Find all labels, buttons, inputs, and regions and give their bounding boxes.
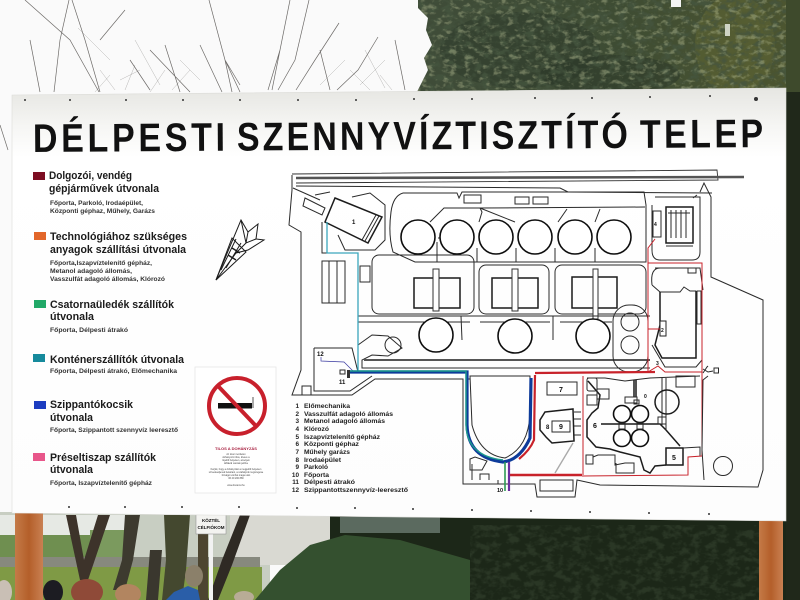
legend item: technology materials: Főporta,Iszapvíztelenítő gépház, bbox=[50, 260, 152, 267]
map: striped building bbox=[322, 261, 370, 303]
map: road around central basin bbox=[470, 376, 530, 458]
notice text: TILOS A DOHÁNYZÁS bbox=[215, 446, 257, 451]
map key: numbered list: Szippantottszennyvíz-leeresztő bbox=[304, 487, 408, 494]
map: NE dewatering complex and 4 bbox=[652, 195, 700, 260]
legend item: staff and guest vehicles: Dolgozói, vendég bbox=[49, 170, 132, 182]
map key: numbered list: 10 bbox=[292, 472, 299, 479]
map key: numbered list: Délpesti átrakó bbox=[304, 479, 355, 486]
map key: numbered list: 7 bbox=[295, 449, 299, 456]
title: SZENNYVÍZTISZTÍTÓ bbox=[237, 111, 628, 159]
legend item: technology materials: Technológiához szükséges bbox=[50, 231, 187, 243]
map key: numbered list: Műhely garázs bbox=[304, 449, 350, 456]
legend item: staff and guest vehicles: gépjárművek útvonala bbox=[49, 183, 160, 195]
legend item: sewer sediment: útvonala bbox=[50, 311, 95, 323]
notice text: Kérjük, hogy a dohányzást a megjelölt helyeken bbox=[211, 468, 262, 471]
map: west yard and station 11/12: 10 bbox=[497, 488, 503, 494]
map: coloured transport routes bbox=[327, 222, 702, 491]
legend item: container transport: Főporta, Délpesti átrakó, Előmechanika bbox=[50, 368, 178, 375]
right wooden post bbox=[759, 520, 783, 600]
map key: numbered list: 1 bbox=[295, 403, 299, 410]
map: right building with 2 and 3: 3 bbox=[656, 361, 659, 367]
background: dark bush lower right bbox=[255, 516, 786, 600]
legend bbox=[33, 170, 187, 487]
legend item: pressed sludge bbox=[33, 452, 157, 487]
map: south-east works with buildings 5 and 6: 6 bbox=[593, 423, 597, 430]
map: small details east bbox=[702, 366, 732, 480]
map: garage 7 and office buildings 8 and 9 bbox=[540, 382, 581, 491]
legend item: technology materials: Metanol adagoló állomás, bbox=[50, 268, 132, 275]
legend item: technology materials bbox=[34, 231, 187, 283]
legend item: technology materials: Vasszulfát adagoló állomás, Klórozó bbox=[50, 276, 165, 283]
legend item: suction trucks bbox=[34, 399, 178, 434]
map: garage 7 and office buildings 8 and 9: 7 bbox=[559, 387, 563, 394]
map: lower row tanks bbox=[358, 305, 650, 372]
legend item: sewer sediment: Csatornaüledék szállítók bbox=[50, 299, 175, 311]
map key: numbered list: 9 bbox=[295, 464, 299, 471]
title bbox=[33, 110, 763, 161]
map key: numbered list: Iszapvíztelenítő gépház bbox=[304, 434, 380, 441]
map key: numbered list: 2 bbox=[295, 411, 299, 418]
small sign on pole: KÖZTÉL bbox=[202, 516, 220, 523]
visitors at bottom bbox=[0, 565, 254, 600]
map: south-east works with buildings 5 and 6: 0 bbox=[644, 394, 647, 400]
icon: no smoking bbox=[209, 378, 265, 434]
map: middle row basins bbox=[372, 255, 646, 319]
title: DÉLPESTI bbox=[33, 114, 225, 161]
map key: numbered list: Előmechanika bbox=[304, 403, 350, 410]
map key: numbered list: Klórozó bbox=[304, 426, 329, 433]
legend item: sewer sediment: Főporta, Délpesti átrakó bbox=[50, 327, 128, 334]
map: south-east works with buildings 5 and 6 bbox=[586, 376, 700, 473]
background: lower left park bbox=[0, 512, 340, 600]
map: pre-treatment building 1: 1 bbox=[352, 220, 356, 226]
left wooden post bbox=[15, 512, 43, 600]
map: garage 7 and office buildings 8 and 9: 8 bbox=[546, 425, 550, 431]
map key: numbered list: Vasszulfát adagoló állomás bbox=[304, 411, 393, 418]
map: top row tanks block bbox=[390, 192, 646, 262]
legend item: suction trucks: Szippantókocsik bbox=[50, 399, 134, 411]
legend item: suction trucks: Főporta, Szippantott szennyvíz leeresztő bbox=[50, 427, 178, 434]
map key: numbered list: Központi géphaz bbox=[304, 441, 359, 448]
map key: numbered list: 6 bbox=[295, 441, 299, 448]
map key: numbered list: Metanol adagoló állomás bbox=[304, 418, 385, 425]
map key: numbered list: 8 bbox=[295, 457, 299, 464]
legend item: pressed sludge: útvonala bbox=[50, 464, 94, 476]
background: bare branches bbox=[0, 0, 405, 150]
notice text: szíveskedjenek betartani, a szabályok megszegése bbox=[209, 471, 264, 474]
notice text: dohányozni tilos, kivéve a bbox=[222, 456, 250, 459]
map key: numbered list: 11 bbox=[292, 479, 299, 486]
legend item: sewer sediment bbox=[34, 299, 175, 334]
map: west yard and station 11/12: 11 bbox=[339, 380, 346, 386]
notice text: www.fovarosi.hu bbox=[227, 484, 245, 487]
map key: numbered list: Irodaépület bbox=[304, 457, 342, 464]
map key: numbered list: 5 bbox=[295, 434, 299, 441]
map key: numbered list: 4 bbox=[295, 426, 299, 433]
map: site boundary bbox=[289, 175, 763, 497]
mounting screws bbox=[24, 95, 758, 515]
notice text: táblával vannak jelölve bbox=[224, 462, 249, 465]
notice text: bírságot vonhat maga után bbox=[222, 474, 251, 477]
legend item: container transport: Konténerszállítók útvonala bbox=[50, 354, 185, 366]
map: south-east works with buildings 5 and 6: 5 bbox=[672, 455, 676, 462]
legend item: container transport bbox=[33, 354, 185, 375]
map: road band along the top bbox=[292, 170, 744, 193]
route: shared main road multi-colour bbox=[350, 371, 531, 491]
map key: numbered list bbox=[292, 403, 408, 494]
background: tree foliage top right bbox=[410, 0, 800, 600]
notice text bbox=[209, 446, 264, 487]
map: west yard and station 11/12: 12 bbox=[317, 352, 324, 358]
small sign on pole: CÉLFIÓKOM bbox=[198, 523, 225, 530]
map: NE dewatering complex and 4: 4 bbox=[654, 222, 657, 228]
notice text: 06 40 200 880 bbox=[228, 477, 244, 480]
map: garage 7 and office buildings 8 and 9: 9 bbox=[559, 424, 563, 431]
no smoking notice bbox=[195, 367, 276, 493]
map: right building with 2 and 3 bbox=[652, 268, 703, 367]
notice text: Az üzem területén bbox=[226, 453, 246, 456]
map: pre-treatment building 1 bbox=[293, 188, 385, 253]
legend item: staff and guest vehicles bbox=[33, 170, 160, 215]
legend item: staff and guest vehicles: Főporta, Parkoló, Irodaépület, bbox=[50, 200, 143, 207]
legend item: pressed sludge: Főporta, Iszapvíztelenítő gépház bbox=[50, 480, 152, 487]
legend item: staff and guest vehicles: Központi géphaz, Műhely, Garázs bbox=[50, 208, 156, 215]
map: right building with 2 and 3: 2 bbox=[661, 328, 664, 334]
legend item: pressed sludge: Préseltiszap szállítók bbox=[50, 452, 157, 464]
site map bbox=[289, 170, 763, 497]
icon: north arrow compass bbox=[216, 220, 264, 280]
legend item: suction trucks: útvonala bbox=[50, 412, 94, 424]
map: west yard and station 11/12 bbox=[302, 348, 503, 494]
route: red staff and technology route bbox=[508, 239, 702, 476]
map key: numbered list: Parkoló bbox=[304, 464, 328, 471]
legend item: technology materials: anyagok szállítási útvonala bbox=[50, 244, 187, 256]
map key: numbered list: Főporta bbox=[304, 472, 329, 479]
title: TELEP bbox=[640, 110, 763, 157]
map key: numbered list: 3 bbox=[295, 418, 299, 425]
map key: numbered list: 12 bbox=[292, 487, 299, 494]
sign board bbox=[12, 88, 786, 521]
small sign on pole bbox=[196, 514, 226, 600]
notice text: kijelölt helyeken, amelyek bbox=[222, 459, 250, 462]
route: container and sediment to pre-treatment bbox=[327, 222, 358, 372]
